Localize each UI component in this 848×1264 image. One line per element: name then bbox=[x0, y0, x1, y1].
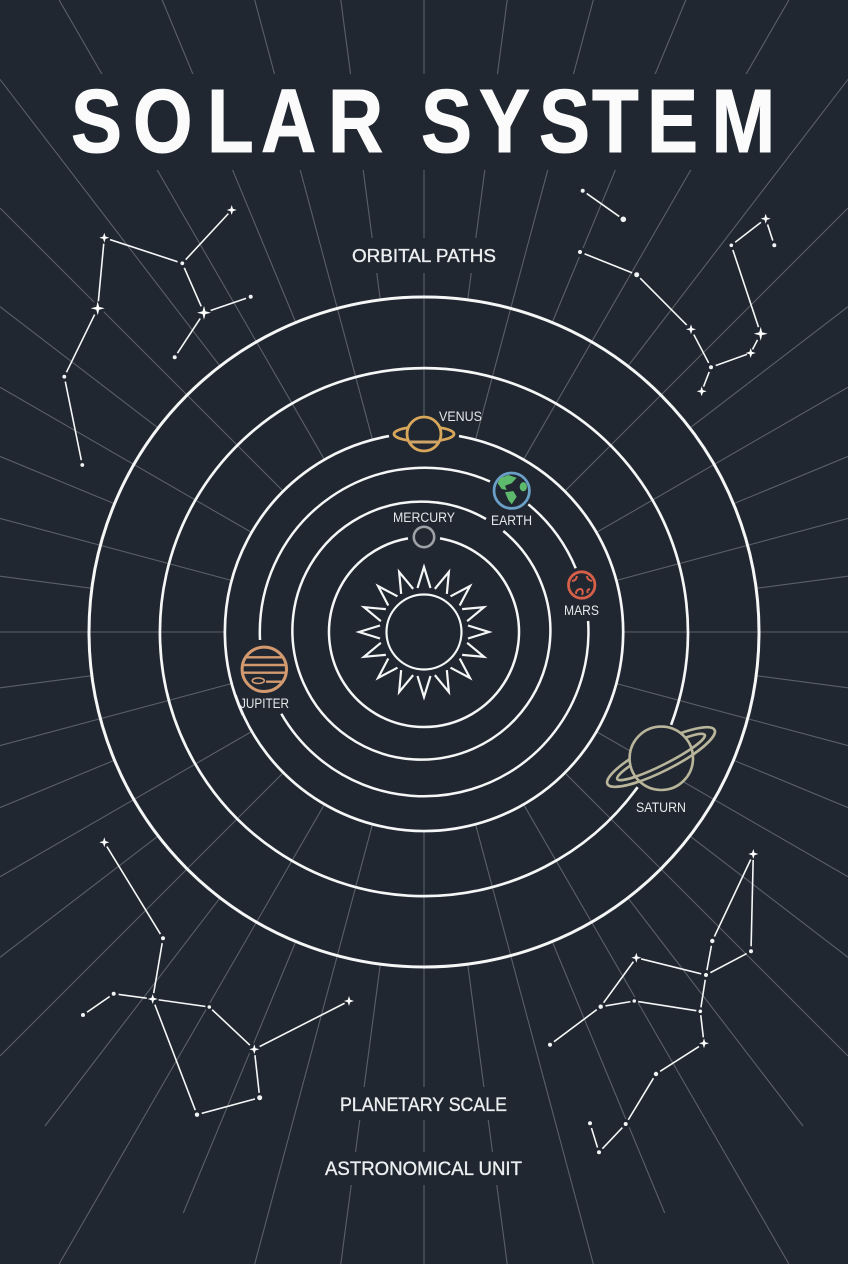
constellation: upper left bbox=[59, 205, 256, 470]
label: earth: EARTH bbox=[491, 513, 532, 528]
title: SOLAR SYSTEM bbox=[71, 70, 775, 171]
orbits bbox=[89, 297, 759, 967]
planet: venus bbox=[394, 409, 482, 451]
constellation: upper right bbox=[575, 186, 779, 396]
label: jupiter: JUPITER bbox=[240, 696, 289, 711]
planet: saturn bbox=[601, 717, 721, 815]
orbit 5 bbox=[160, 368, 688, 896]
orbit 2 bbox=[292, 502, 550, 760]
constellation: lower right bbox=[545, 848, 759, 1157]
orbit 1 bbox=[329, 538, 519, 727]
orbit 6 bbox=[89, 297, 759, 967]
label: saturn: SATURN bbox=[636, 800, 686, 815]
planet: mercury bbox=[393, 510, 455, 547]
label: mars: MARS bbox=[564, 603, 599, 618]
label: mercury: MERCURY bbox=[393, 510, 455, 525]
planet: jupiter bbox=[240, 647, 289, 711]
planet: mars bbox=[564, 572, 599, 618]
label: venus: VENUS bbox=[439, 409, 482, 424]
constellation: lower left bbox=[78, 837, 354, 1120]
orbit 4 bbox=[225, 436, 623, 831]
sun bbox=[359, 567, 489, 697]
label: astronomical unit: ASTRONOMICAL UNIT bbox=[325, 1158, 522, 1180]
planet: earth bbox=[491, 473, 532, 528]
heading: orbital paths: ORBITAL PATHS bbox=[352, 246, 496, 266]
text gaps in radial lines bbox=[72, 74, 776, 1185]
label: planetary scale: PLANETARY SCALE bbox=[340, 1094, 507, 1116]
orbit 3 bbox=[260, 468, 588, 796]
